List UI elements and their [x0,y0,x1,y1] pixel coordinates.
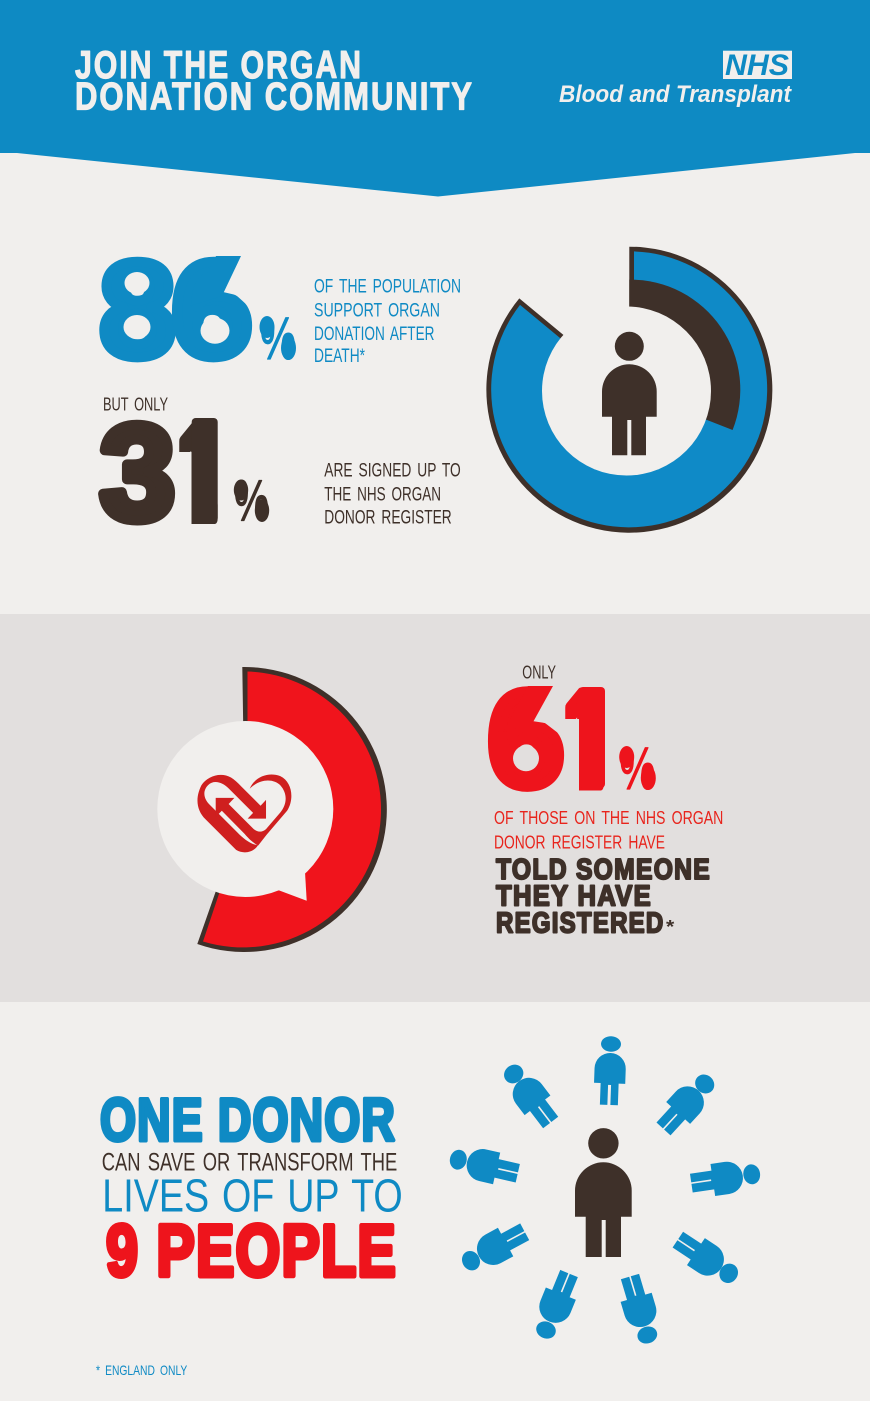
icon: person [602,332,657,455]
chart: red 61 percent ring [157,667,387,952]
stat: 61 percent: 6 [488,664,564,814]
text: told someone they have registered: TOLD SOMEONE [496,854,711,886]
text: but only: BUT ONLY [103,395,168,415]
title [75,44,474,118]
text: of the population: DONATION AFTER [314,323,434,345]
stat: 61 percent [488,664,656,814]
stat: 86 percent [100,234,296,385]
logo: NHS Blood and Transplant: Blood and Transplant [559,81,792,108]
text: are signed up: DONOR REGISTER [324,506,452,528]
icon: nine surrounding people [447,1036,762,1348]
text: of those on the register [494,807,723,852]
text: of the population: OF THE POPULATION [314,275,461,297]
text: of the population [314,275,461,367]
heading: one donor: ONE DONOR [100,1086,396,1153]
panel: one donor [96,1036,762,1378]
title: JOIN THE ORGAN [75,44,363,87]
text: of the population: SUPPORT ORGAN [314,300,440,322]
panel: register statistics [0,614,870,1002]
text: are signed up: ARE SIGNED UP TO [324,460,461,482]
text: of those on the register: DONOR REGISTER HAVE [494,831,665,852]
text: only: ONLY [522,662,556,682]
stat: 86 percent: 6 [172,234,252,385]
chart: ring 86 and 31 percent [486,247,772,533]
text: told someone they have registered: THEY HAVE [496,881,652,913]
stat: 86 percent: % [260,305,296,372]
icon: central person [575,1128,632,1257]
heading: 9 people: 9 PEOPLE [106,1211,397,1292]
text: are signed up [324,460,461,528]
stat: 31 percent: % [234,468,269,534]
stat: 61 percent: % [620,735,656,802]
text: of those on the register: OF THOSE ON THE NHS ORGAN [494,807,723,828]
text: told someone they have registered [496,854,711,939]
footnote: * ENGLAND ONLY [96,1362,188,1378]
logo: NHS Blood and Transplant: NHS [725,49,789,82]
stat: 61 percent: 1 [563,664,603,814]
panel: support statistics [100,234,772,548]
title: DONATION COMMUNITY [75,76,474,118]
text: are signed up: THE NHS ORGAN [324,484,441,506]
stat: 31 percent: 3 [100,397,175,548]
stat: 31 percent [100,397,269,548]
text: lives of up to: LIVES OF UP TO [102,1170,403,1222]
icon: heart logo [197,775,291,852]
text: of the population: DEATH* [314,345,365,367]
panel: header banner [0,0,870,196]
logo: NHS Blood and Transplant [559,49,792,108]
text: told someone they have registered: * [666,917,676,937]
text: can save or transform the: CAN SAVE OR TRANSFORM THE [102,1149,397,1177]
stat: 86 percent: 8 [100,234,175,385]
icon: speech bubble [157,721,333,901]
stat: 31 percent: 1 [177,397,217,548]
text: told someone they have registered: REGISTERED [496,907,664,939]
